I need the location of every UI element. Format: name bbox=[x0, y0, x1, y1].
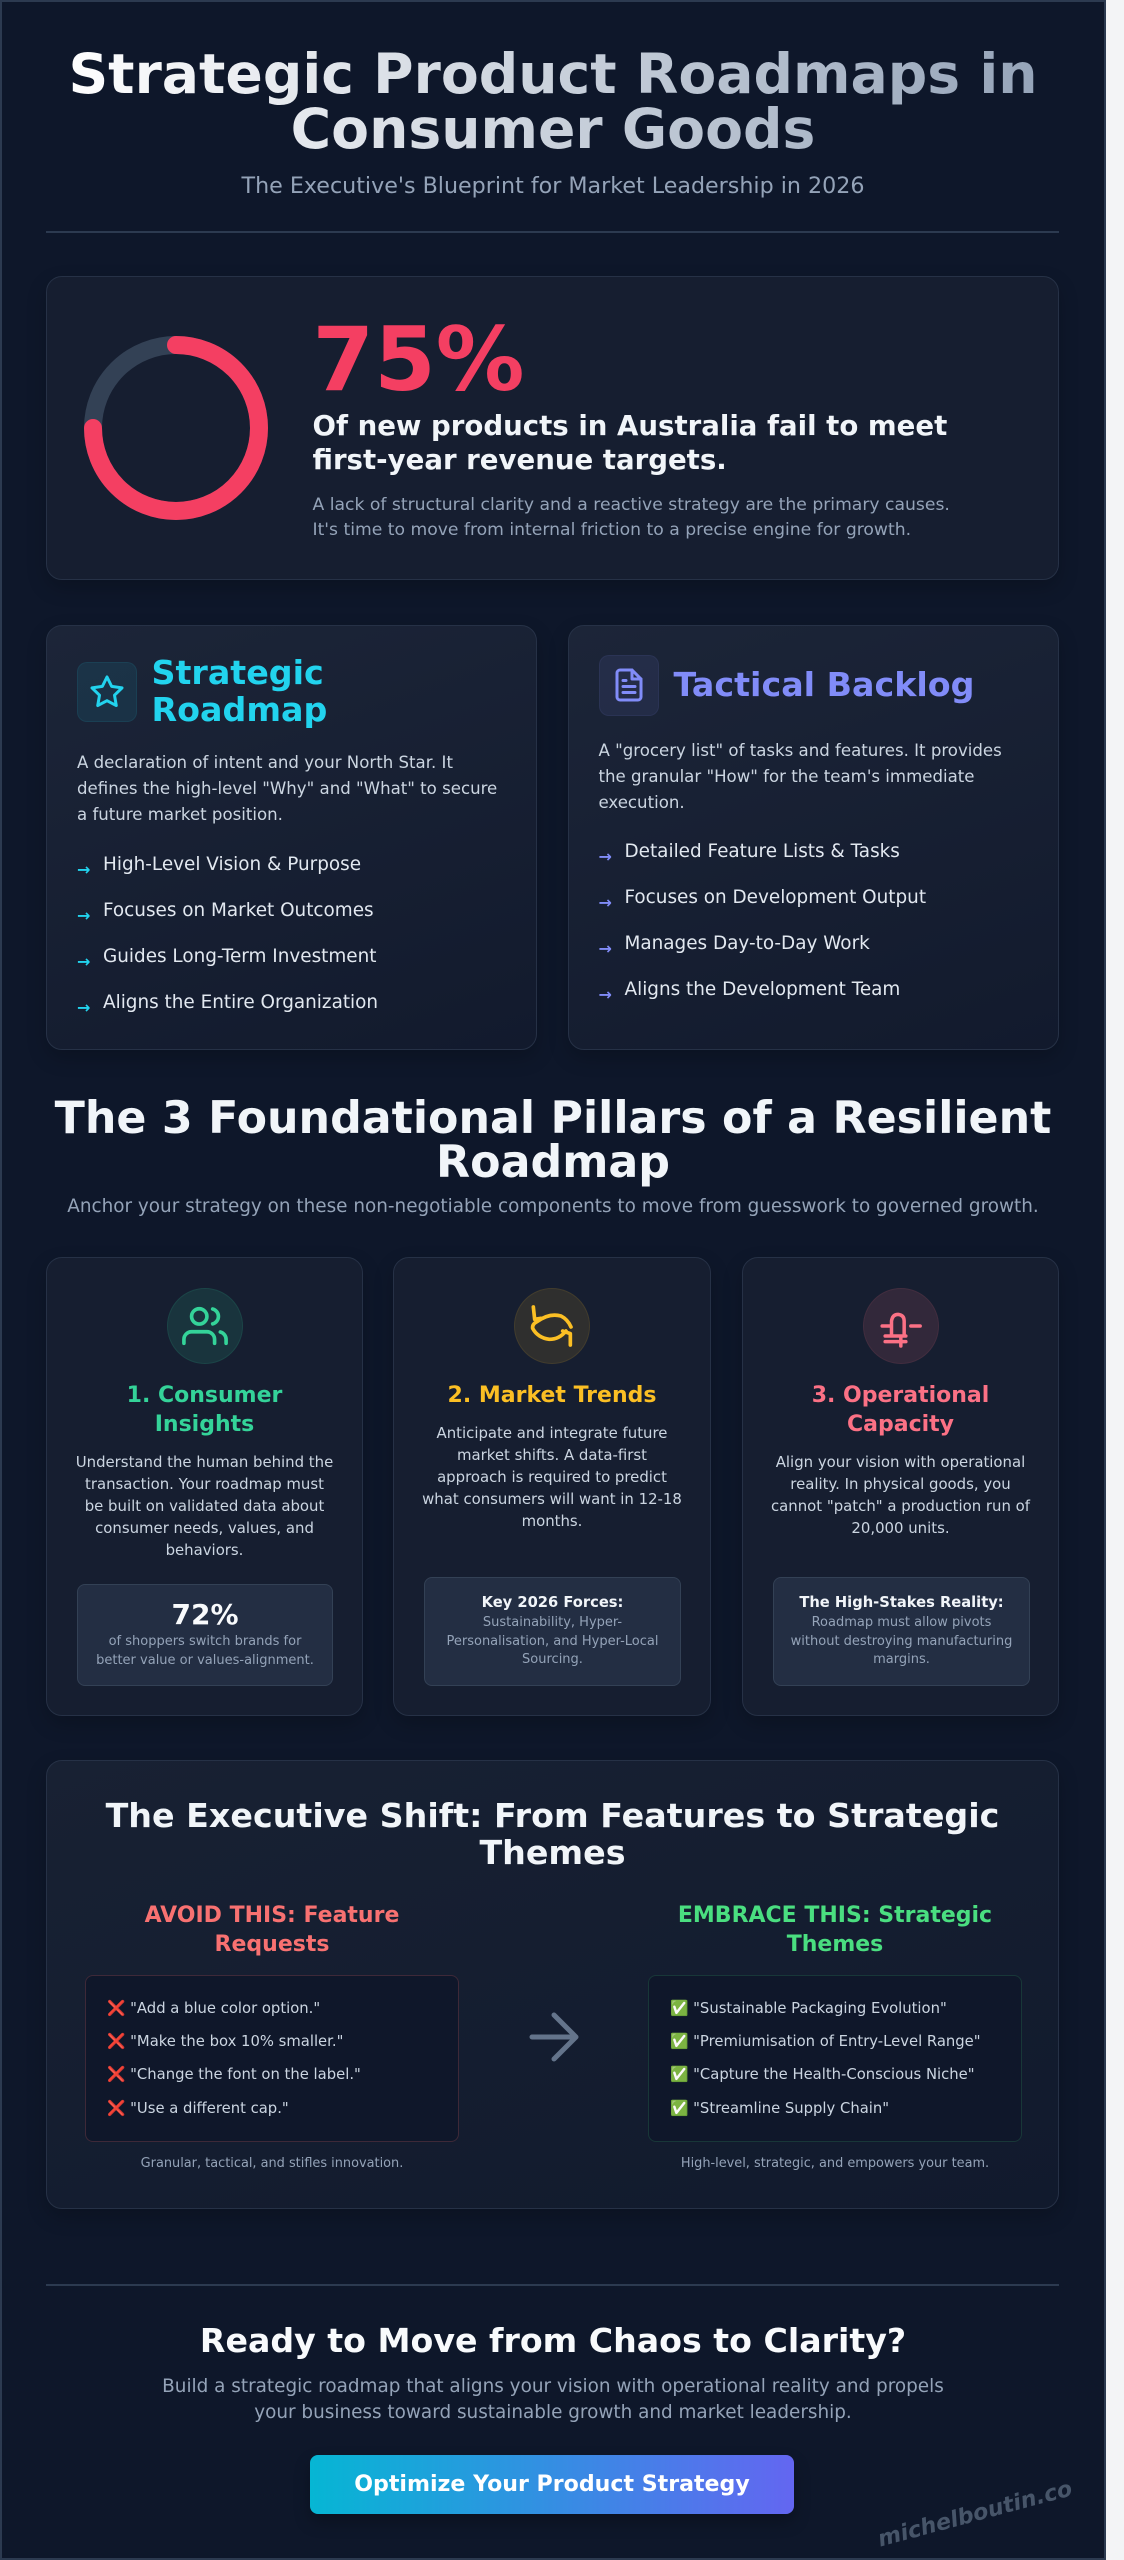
panel: executive shift bbox=[46, 1760, 1059, 2209]
pillars subtitle: Anchor your strategy on these non-negotiable components to move from guesswork to governed growth. bbox=[67, 1196, 1039, 1217]
pillar text: 20,000 units. bbox=[851, 1519, 950, 1537]
pillar text bbox=[771, 1453, 1030, 1537]
title: Consumer Goods bbox=[291, 98, 815, 162]
list: embrace: ✅ "Sustainable Packaging Evolution" bbox=[670, 2000, 947, 2017]
stat number: 72% bbox=[171, 1598, 239, 1631]
panel: strategic roadmap bbox=[46, 625, 537, 1050]
heading: Roadmap bbox=[152, 690, 327, 729]
box text: margins. bbox=[873, 1652, 930, 1667]
icon: trend cycle bbox=[514, 1288, 590, 1364]
heading: pillars: The 3 Foundational Pillars of a Resilient bbox=[55, 1093, 1051, 1144]
pillar text: months. bbox=[522, 1512, 582, 1530]
hero description bbox=[312, 494, 950, 540]
list: roadmap traits: → bbox=[77, 998, 90, 1016]
panel: hero statistic bbox=[46, 276, 1059, 580]
description: A "grocery list" of tasks and features. It provides bbox=[598, 741, 1002, 760]
pillar text: Anticipate and integrate future bbox=[437, 1424, 667, 1442]
pillar text bbox=[76, 1453, 333, 1559]
title: Strategic Product Roadmaps in bbox=[68, 43, 1038, 107]
heading: Strategic bbox=[152, 653, 324, 692]
pillar text bbox=[422, 1424, 682, 1530]
pillar heading bbox=[812, 1383, 989, 1437]
list: backlog traits: → bbox=[598, 938, 612, 958]
info box: high stakes bbox=[773, 1577, 1030, 1686]
hero heading: Of new products in Australia fail to meet bbox=[312, 409, 947, 442]
pillar text: Understand the human behind the bbox=[76, 1453, 333, 1471]
box text: Personalisation, and Hyper-Local bbox=[446, 1634, 658, 1649]
arrow bbox=[530, 2012, 578, 2062]
embrace heading bbox=[678, 1903, 992, 1957]
list: backlog traits: → bbox=[598, 984, 612, 1004]
list: avoid: ❌ "Make the box 10% smaller." bbox=[107, 2033, 343, 2050]
panel heading: Themes bbox=[479, 1833, 626, 1872]
call to action text: Build a strategic roadmap that aligns your vision with operational reality and propels bbox=[162, 2376, 944, 2397]
watermark: michelboutin.co bbox=[875, 2476, 1075, 2552]
description: defines the high-level "Why" and "What" to secure bbox=[77, 779, 497, 798]
donut chart: 75% bbox=[84, 336, 268, 520]
icon: users bbox=[167, 1288, 243, 1364]
pillar text: behaviors. bbox=[166, 1541, 243, 1559]
pillar text: transaction. Your roadmap must bbox=[85, 1475, 324, 1493]
avoid heading: Requests bbox=[215, 1932, 329, 1957]
list: backlog traits: Aligns the Development Team bbox=[624, 978, 900, 1000]
list: roadmap traits: Aligns the Entire Organization bbox=[103, 992, 378, 1012]
list: roadmap traits: Guides Long-Term Investment bbox=[103, 946, 376, 966]
box text bbox=[446, 1615, 658, 1667]
panel: pillar 2 market trends bbox=[393, 1257, 711, 1716]
stat caption: of shoppers switch brands for bbox=[109, 1634, 301, 1649]
subtitle: The Executive's Blueprint for Market Leadership in 2026 bbox=[242, 172, 864, 198]
stat box: 72% bbox=[77, 1584, 333, 1686]
box text: Sustainability, Hyper- bbox=[483, 1615, 622, 1630]
list: embrace bbox=[648, 1975, 1022, 2142]
pillar text: cannot "patch" a production run of bbox=[771, 1497, 1030, 1515]
list: avoid: ❌ "Add a blue color option." bbox=[107, 2000, 320, 2017]
list: backlog traits: Manages Day-to-Day Work bbox=[624, 932, 870, 954]
button bbox=[310, 2455, 794, 2514]
list: roadmap traits: → bbox=[77, 860, 90, 878]
pillar text: consumer needs, values, and bbox=[95, 1519, 314, 1537]
call to action heading: Ready to Move from Chaos to Clarity? bbox=[200, 2320, 906, 2360]
stat caption bbox=[96, 1634, 314, 1668]
panel: pillar 3 operational capacity bbox=[742, 1257, 1059, 1716]
list: backlog traits: → bbox=[598, 846, 612, 866]
list: roadmap traits: High-Level Vision & Purpose bbox=[103, 854, 361, 874]
pillar heading: 3. Operational bbox=[812, 1383, 989, 1408]
title bbox=[0, 48, 1106, 158]
avoid heading: AVOID THIS: Feature bbox=[145, 1903, 399, 1928]
pillar text: approach is required to predict bbox=[437, 1468, 667, 1486]
list: roadmap traits bbox=[77, 854, 378, 1016]
hero description: A lack of structural clarity and a reactive strategy are the primary causes. bbox=[312, 494, 950, 514]
pillar heading: 2. Market Trends bbox=[448, 1383, 656, 1408]
pillar text: what consumers will want in 12-18 bbox=[422, 1490, 682, 1508]
button: Optimize Your Product Strategy bbox=[354, 2471, 750, 2497]
description bbox=[77, 753, 497, 824]
box text: without destroying manufacturing bbox=[791, 1634, 1012, 1649]
description: execution. bbox=[598, 793, 685, 812]
panel heading: The Executive Shift: From Features to Strategic bbox=[106, 1796, 999, 1835]
pillar heading bbox=[127, 1383, 282, 1437]
list: avoid bbox=[85, 1975, 459, 2142]
heading: pillars: Roadmap bbox=[436, 1137, 670, 1188]
pillar text: be built on validated data about bbox=[85, 1497, 324, 1515]
pillar heading: Capacity bbox=[847, 1412, 954, 1437]
heading: pillars bbox=[54, 1093, 1051, 1188]
list: avoid: ❌ "Change the font on the label." bbox=[107, 2066, 361, 2083]
panel heading bbox=[106, 1796, 999, 1872]
pillar text: market shifts. A data-first bbox=[457, 1446, 647, 1464]
list: backlog traits: Focuses on Development Output bbox=[624, 886, 926, 908]
icon: document bbox=[598, 655, 658, 716]
description: the granular "How" for the team's immediate bbox=[598, 767, 974, 786]
heading: Tactical Backlog bbox=[674, 665, 975, 704]
heading bbox=[152, 653, 327, 729]
list: embrace: ✅ "Capture the Health-Conscious Niche" bbox=[670, 2066, 975, 2083]
pillar heading: 1. Consumer bbox=[127, 1383, 282, 1408]
embrace heading: EMBRACE THIS: Strategic bbox=[678, 1903, 992, 1928]
call to action text bbox=[162, 2376, 944, 2423]
list: avoid: ❌ "Use a different cap." bbox=[107, 2100, 289, 2117]
avoid caption: Granular, tactical, and stifles innovation. bbox=[141, 2156, 403, 2170]
icon: star bbox=[77, 662, 137, 722]
list: roadmap traits: Focuses on Market Outcomes bbox=[103, 900, 374, 920]
stat caption: better value or values-alignment. bbox=[96, 1653, 314, 1668]
list: embrace: ✅ "Streamline Supply Chain" bbox=[670, 2100, 889, 2117]
list: backlog traits: Detailed Feature Lists & Tasks bbox=[624, 840, 900, 862]
icon: capacity bbox=[863, 1288, 939, 1364]
hero heading bbox=[312, 409, 947, 476]
list: roadmap traits: → bbox=[77, 906, 90, 924]
pillar heading: Insights bbox=[155, 1412, 254, 1437]
box text: Sourcing. bbox=[522, 1652, 583, 1667]
box title: Key 2026 Forces: bbox=[482, 1594, 623, 1611]
description: A declaration of intent and your North Star. It bbox=[77, 753, 453, 772]
embrace heading: Themes bbox=[787, 1932, 883, 1957]
hero description: It's time to move from internal friction to a precise engine for growth. bbox=[312, 520, 911, 540]
embrace caption: High-level, strategic, and empowers your team. bbox=[681, 2156, 989, 2170]
call to action text: your business toward sustainable growth and market leadership. bbox=[254, 2402, 852, 2423]
avoid heading bbox=[144, 1903, 399, 1957]
description: a future market position. bbox=[77, 805, 283, 824]
list: backlog traits: → bbox=[598, 892, 612, 912]
box text bbox=[791, 1615, 1012, 1667]
box title: The High-Stakes Reality: bbox=[799, 1594, 1004, 1611]
hero heading: first-year revenue targets. bbox=[312, 443, 727, 476]
info box: key forces bbox=[424, 1577, 681, 1686]
panel: tactical backlog bbox=[568, 625, 1059, 1050]
description bbox=[598, 741, 1002, 812]
pillar text: Align your vision with operational bbox=[776, 1453, 1025, 1471]
pillar text: reality. In physical goods, you bbox=[790, 1475, 1011, 1493]
list: roadmap traits: → bbox=[77, 952, 90, 970]
list: backlog traits bbox=[598, 840, 926, 1004]
panel: pillar 1 consumer insights bbox=[46, 1257, 363, 1716]
box text: Roadmap must allow pivots bbox=[812, 1615, 991, 1630]
big number: 75% bbox=[312, 308, 525, 411]
list: embrace: ✅ "Premiumisation of Entry-Level Range" bbox=[670, 2033, 981, 2050]
